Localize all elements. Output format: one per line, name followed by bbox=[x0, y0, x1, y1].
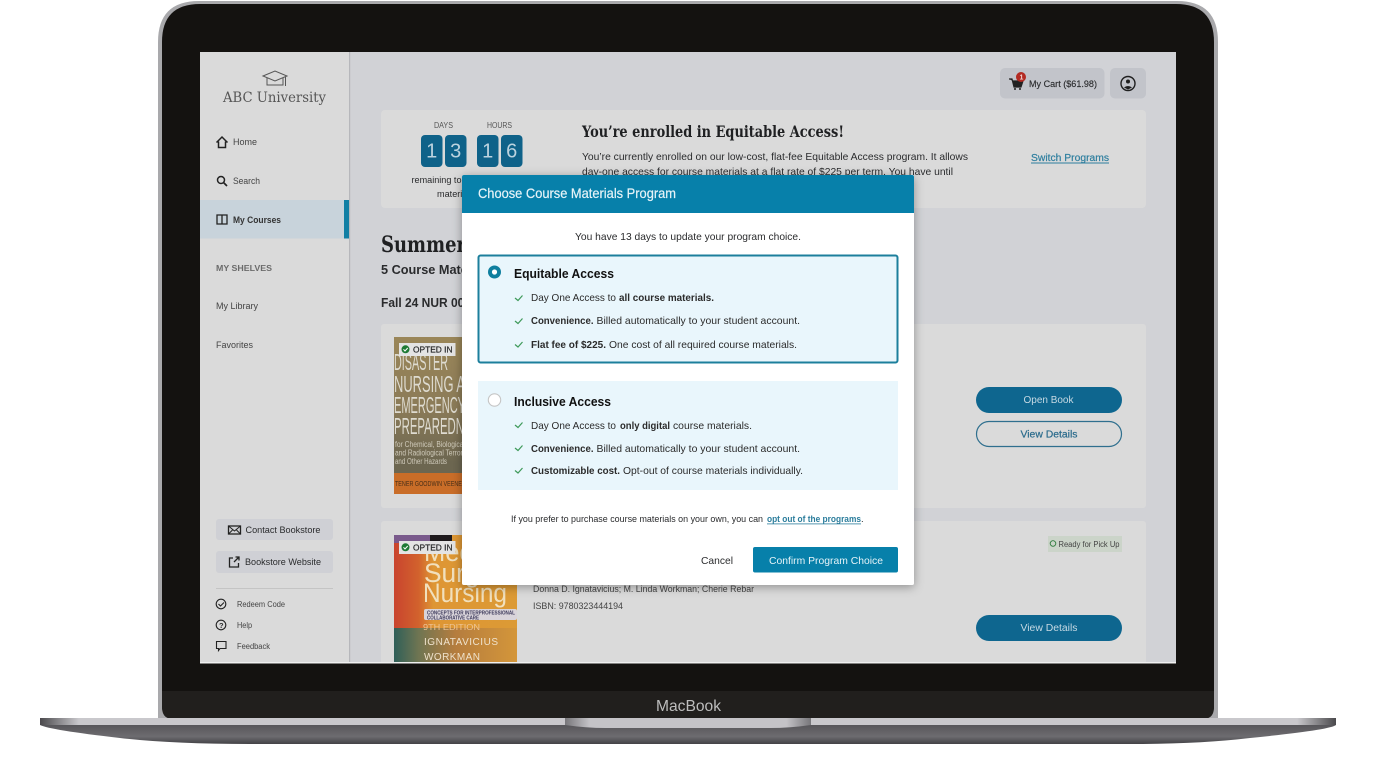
button: open book bbox=[976, 387, 1122, 413]
benefit: convenience: Billed automatically to your student account. bbox=[596, 443, 800, 455]
book cover: medical surgical nursing: Nursing bbox=[423, 578, 507, 608]
book authors: Donna D. Ignatavicius; M. Linda Workman; Cherie Rebar bbox=[533, 584, 754, 594]
opt out note: . bbox=[861, 514, 864, 525]
link: switch programs: Switch Programs bbox=[1031, 153, 1109, 164]
logo text: ABC University bbox=[222, 90, 326, 106]
badge: opted in bbox=[399, 541, 456, 554]
countdown caption: materials bbox=[437, 189, 475, 199]
banner heading: You’re enrolled in Equitable Access! bbox=[581, 122, 844, 141]
panel: book card 1 bbox=[381, 324, 1146, 508]
countdown: hours: HOURS bbox=[487, 121, 512, 130]
badge: opted in bbox=[399, 343, 456, 356]
countdown: hours: 1 bbox=[482, 140, 493, 162]
benefit: digital access: course materials. bbox=[673, 420, 752, 432]
nav: Home: Home bbox=[233, 137, 257, 147]
button: confirm program choice: Confirm Program Choice bbox=[769, 555, 883, 567]
badge: ready for pick up: Ready for Pick Up bbox=[1058, 540, 1120, 549]
option: equitable access bbox=[478, 256, 898, 362]
countdown: hours: 6 bbox=[506, 140, 517, 162]
book cover: disaster nursing: and Radiological Terrorism bbox=[395, 448, 473, 458]
button: Contact Bookstore bbox=[216, 519, 333, 540]
benefit: digital access bbox=[515, 420, 752, 432]
screen bbox=[200, 52, 1176, 671]
panel: book card 2 bbox=[381, 521, 1146, 671]
shelves heading: MY SHELVES bbox=[216, 263, 272, 273]
banner body text: day-one access for course materials at a flat rate of $225 per term. You have until bbox=[582, 166, 953, 178]
option: equitable access: Equitable Access bbox=[514, 267, 614, 281]
icon: graduation cap logo bbox=[263, 71, 287, 86]
book cover: disaster nursing: EMERGENCY bbox=[394, 392, 465, 418]
link: Help bbox=[216, 620, 253, 630]
book cover: medical surgical nursing: 9TH EDITION bbox=[423, 622, 480, 632]
countdown: days: DAYS bbox=[434, 121, 453, 130]
opt out note: opt out of the programs bbox=[767, 514, 861, 525]
link: Redeem Code: Redeem Code bbox=[237, 600, 286, 609]
button: cart: My Cart ($61.98) bbox=[1029, 79, 1097, 90]
button: cancel: Cancel bbox=[701, 555, 733, 567]
benefit: convenience: Convenience. bbox=[531, 443, 594, 455]
course materials count: 5 Course Materials bbox=[381, 263, 494, 277]
button: view details outline bbox=[976, 422, 1122, 446]
button: cart bbox=[1000, 68, 1104, 98]
MacBook label: MacBook bbox=[656, 698, 722, 715]
book cover: disaster nursing bbox=[394, 337, 462, 494]
book cover: medical surgical nursing: CONCEPTS FOR INTERPROFESSIONAL bbox=[427, 610, 515, 616]
benefit: convenience: Convenience. bbox=[531, 315, 594, 327]
nav: Search: Search bbox=[233, 176, 260, 186]
modal header: Choose Course Materials Program bbox=[478, 185, 676, 201]
book ISBN: ISBN: 9780323444194 bbox=[533, 601, 623, 611]
banner body text: You’re currently enrolled on our low-cost, flat-fee Equitable Access program. It allows bbox=[582, 151, 968, 163]
benefit: convenience: Billed automatically to your student account. bbox=[596, 315, 800, 327]
nav: Home bbox=[216, 137, 257, 148]
badge: opted in: OPTED IN bbox=[413, 344, 452, 354]
book cover: medical surgical nursing: Surgical bbox=[424, 558, 519, 588]
benefit: day one access: Day One Access to bbox=[531, 292, 616, 304]
countdown: days bbox=[421, 121, 466, 167]
benefit: digital access: Day One Access to bbox=[531, 420, 616, 432]
benefit: flat fee: One cost of all required course materials. bbox=[609, 339, 797, 351]
countdown: days: 3 bbox=[450, 140, 461, 162]
banner body text bbox=[582, 152, 968, 175]
section heading: Summer bbox=[381, 232, 466, 258]
link: Help: Help bbox=[237, 621, 253, 630]
nav: Search bbox=[218, 176, 260, 186]
button: view details bbox=[976, 615, 1122, 641]
benefit: flat fee: Flat fee of $225. bbox=[531, 339, 606, 351]
button: view details outline: View Details bbox=[1020, 430, 1078, 440]
button: confirm program choice bbox=[753, 547, 898, 572]
nav: My Library: My Library bbox=[216, 301, 258, 311]
option: inclusive access bbox=[478, 381, 898, 490]
book cover: medical surgical nursing: Medical bbox=[424, 537, 512, 567]
nav: My Courses active: My Courses bbox=[233, 215, 281, 225]
laptop: lid and bezel bbox=[158, 1, 1218, 718]
button: Contact Bookstore: Contact Bookstore bbox=[246, 525, 320, 535]
countdown caption: remaining to bbox=[412, 175, 462, 185]
panel: sidebar bbox=[200, 52, 350, 663]
countdown: hours bbox=[477, 121, 522, 167]
countdown caption bbox=[412, 176, 462, 197]
benefit: customizable cost: Opt-out of course materials individually. bbox=[623, 465, 803, 477]
option: inclusive access: Inclusive Access bbox=[514, 395, 611, 409]
book cover: disaster nursing: PREPAREDN bbox=[394, 413, 464, 439]
book cover: medical surgical nursing: IGNATAVICIUS bbox=[424, 637, 498, 648]
benefit: day one access: all course materials. bbox=[619, 292, 714, 304]
benefit: customizable cost bbox=[515, 465, 803, 477]
button: open book: Open Book bbox=[1024, 395, 1074, 406]
opt out note: If you prefer to purchase course materials on your own, you can bbox=[511, 514, 763, 525]
countdown: days: 1 bbox=[426, 140, 437, 162]
button: view details: View Details bbox=[1020, 623, 1078, 634]
modal header bbox=[462, 175, 914, 213]
benefit: day one access bbox=[515, 292, 714, 304]
button: profile bbox=[1110, 68, 1146, 98]
course name: Fall 24 NUR 001 bbox=[381, 296, 471, 310]
button: Bookstore Website bbox=[216, 551, 333, 573]
link: Feedback: Feedback bbox=[237, 642, 271, 651]
book cover: disaster nursing: DISASTER bbox=[394, 349, 448, 375]
nav: Favorites: Favorites bbox=[216, 340, 253, 350]
nav: My Courses active bbox=[200, 200, 349, 238]
book cover: medical surgical nursing: COLLABORATIVE CARE bbox=[427, 616, 480, 622]
badge: ready for pick up bbox=[1048, 536, 1122, 552]
book cover: disaster nursing: NURSING A bbox=[394, 371, 465, 397]
modal intro text: You have 13 days to update your program choice. bbox=[575, 231, 801, 243]
link: Feedback bbox=[216, 642, 271, 651]
book cover: disaster nursing: TENER GOODWIN VEENEMA bbox=[395, 479, 470, 488]
modal dialog bbox=[462, 175, 914, 585]
panel: enrollment banner bbox=[381, 110, 1146, 208]
badge: opted in: OPTED IN bbox=[413, 542, 452, 552]
link: Help: ? bbox=[219, 621, 224, 630]
link: Redeem Code bbox=[216, 599, 286, 609]
book cover: disaster nursing: and Other Hazards bbox=[395, 457, 447, 466]
laptop: base bbox=[40, 718, 1336, 744]
benefit: flat fee bbox=[515, 339, 797, 351]
button: cart: 1 bbox=[1020, 74, 1024, 82]
button: Bookstore Website: Bookstore Website bbox=[245, 557, 321, 567]
benefit: digital access: only digital bbox=[620, 420, 670, 432]
benefit: customizable cost: Customizable cost. bbox=[531, 465, 620, 477]
book cover: disaster nursing: for Chemical, Biological bbox=[395, 440, 465, 449]
book cover: medical surgical nursing: WORKMAN bbox=[424, 652, 480, 663]
book cover: medical surgical nursing bbox=[394, 535, 519, 663]
